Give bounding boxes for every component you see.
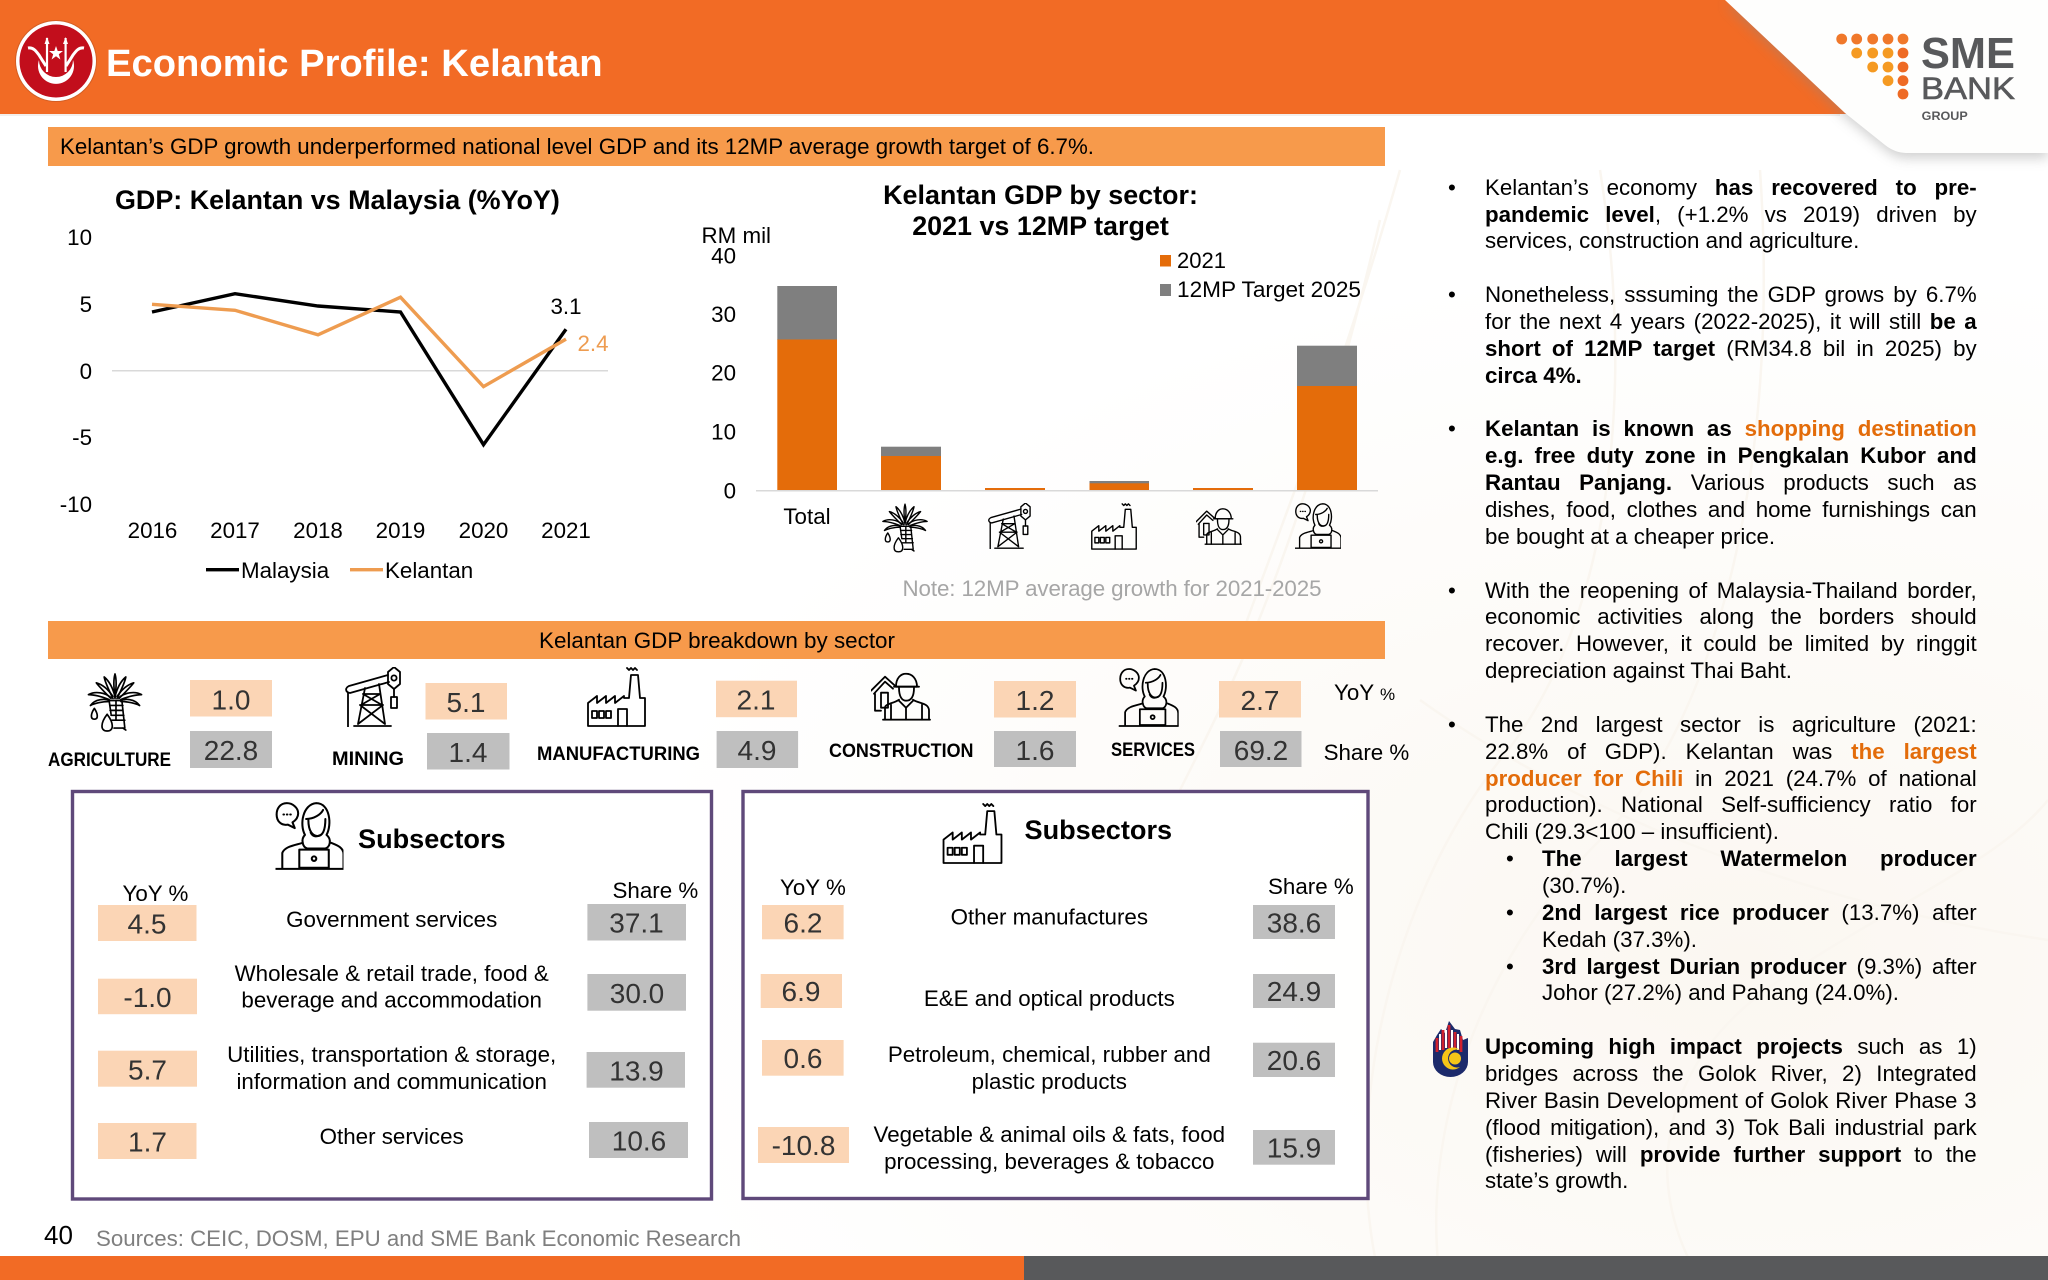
text block: 12MP target: short of 12MP target (RM34.8 bil in 2025) by [1485,336,1977,361]
text block: agriculture: Johor (27.2%) and Pahang (24.0%). [1542,980,1899,1005]
y axis labels: 40 [711,244,736,269]
text block: agriculture: (30.7%). [1542,873,1626,898]
line chart: GDP Kelantan vs Malaysia [60,185,609,583]
text block: shopping destination [1448,416,1977,549]
text block: agriculture: Chili (29.3<100 – insufficient). [1485,819,1779,844]
row: wholesale and retail: beverage and accommodation [241,988,542,1012]
icon: services [276,803,344,869]
y axis labels: 30 [711,302,736,327]
data label: Kelantan 2021: 2.4 [577,331,609,356]
sector: construction: 1.6 [1016,735,1054,766]
icon: agriculture [883,504,927,552]
text block: agriculture: Kedah (37.3%). [1542,927,1697,952]
series: Malaysia [152,294,566,445]
chart title: Kelantan GDP by sector: [883,180,1198,210]
x axis labels [128,518,591,543]
y axis labels: 10 [67,225,92,250]
row: government services: Government services [286,907,497,932]
y axis labels: 0 [80,359,92,384]
row: wholesale and retail: 30.0 [610,978,664,1009]
header shadow line [0,114,1840,116]
text block: agriculture: The largest Watermelon producer [1542,846,1977,871]
sector: mining: MINING [332,748,404,770]
y axis labels: 0 [724,479,736,504]
y axis labels: 20 [711,361,736,386]
text block: shopping destination: dishes, food, clothes and home furnishings can [1485,497,1977,522]
row label: Share %: Share % [1324,740,1409,765]
sector: agriculture: 1.0 [212,684,250,716]
row: wholesale and retail: Wholesale & retail trade, food & [235,961,549,986]
header bar [0,0,2048,114]
row: utilities and transport: 13.9 [609,1056,664,1086]
text block: agriculture: 3rd largest Durian producer (9.3%) after [1542,954,1977,979]
text block: high impact projects: state’s growth. [1485,1168,1628,1193]
row: wholesale and retail: -1.0 [123,982,172,1013]
row: other manufactures: 6.2 [784,908,822,938]
x axis labels: 2019 [376,518,425,543]
panel: commentary: • [1448,416,1456,441]
logo corner panel [1725,0,2048,158]
text block: agriculture: 22.8% of GDP). Kelantan was the largest [1485,739,1977,764]
legend: Malaysia [241,558,330,583]
sector: services: 2.7 [1241,685,1279,716]
sector: manufacturing: MANUFACTURING [537,743,700,765]
legend: 12MP Target 2025 [1177,277,1361,302]
icon: manufacturing [944,804,1001,863]
text block: border reopening: With the reopening of Malaysia-Thailand border, [1485,578,1977,603]
row: wholesale and retail [98,961,686,1014]
sector: construction: CONSTRUCTION [829,740,974,762]
text block: 12MP target [1448,282,1977,388]
y axis labels: -10 [60,492,92,517]
sector: mining: 1.4 [449,737,487,768]
legend: Kelantan [385,558,473,583]
icon: Kelantan state emblem [15,20,97,102]
sector: manufacturing: 2.1 [737,684,775,716]
row: E&E and optical [761,974,1335,1011]
column header: Share: Share % [612,878,698,903]
row: vegetable and animal oils: processing, beverages & tobacco [884,1149,1214,1174]
row: other manufactures: 38.6 [1267,908,1321,938]
text block: high impact projects: River Basin Development of Golok River Phase 3 [1485,1088,1977,1113]
x axis labels: 2018 [293,518,343,543]
sector: agriculture: 22.8 [204,735,258,766]
bars: 2021 [777,340,1357,491]
text block: shopping destination: be bought at a cheaper price. [1485,524,1775,549]
panel: manufacturing subsectors [743,792,1368,1198]
series: Kelantan [152,297,566,387]
y axis labels: 10 [711,420,736,445]
sector breakdown banner: Kelantan GDP breakdown by sector [539,628,896,653]
row: E&E and optical: E&E and optical products [924,986,1175,1011]
text block: agriculture: • [1506,900,1514,925]
row: utilities and transport: information and communication [236,1069,547,1094]
row: E&E and optical: 6.9 [782,976,820,1007]
legend [1160,248,1361,302]
background swirls [1180,170,2048,1280]
text block: 12MP target: circa 4%. [1485,363,1582,388]
row: other services: Other services [320,1124,464,1149]
column header: YoY: YoY % [122,881,188,906]
source note: Sources: CEIC, DOSM, EPU and SME Bank Economic Research [96,1226,741,1251]
text block: recovery: Kelantan’s economy has recovered to pre- [1485,175,1977,200]
row: petroleum and chemical: 0.6 [784,1043,822,1074]
headline banner: Kelantan’s GDP growth underperformed national level GDP and its 12MP average growth target of 6.7%. [60,134,1094,159]
chart title [883,180,1198,241]
sector: agriculture: AGRICULTURE [48,749,171,771]
panel: commentary: • [1448,712,1456,737]
row: vegetable and animal oils [758,1122,1335,1174]
text block: shopping destination: Rantau Panjang. Various products such as [1485,470,1977,495]
logo: SME Bank Group: SME [1921,29,2015,78]
y axis labels: -5 [72,425,92,450]
chart title: 2021 vs 12MP target [912,211,1169,241]
text block: recovery: services, construction and agriculture. [1485,228,1859,253]
row: petroleum and chemical: plastic products [972,1069,1127,1094]
row: E&E and optical: 24.9 [1267,976,1321,1007]
data label: Malaysia 2021: 3.1 [550,294,582,319]
row: other manufactures [762,904,1335,939]
sector: mining: 5.1 [447,687,485,718]
row: other services: 10.6 [612,1126,666,1156]
column header: YoY: YoY % [780,875,846,900]
text block: 12MP target: for the next 4 years (2022-2025), it will still be a [1485,309,1977,334]
text block: agriculture: • [1506,846,1514,871]
panel: commentary: • [1448,175,1456,200]
panel: commentary: • [1448,578,1456,603]
text block: agriculture: producer for Chili in 2021 (24.7% of national [1485,766,1977,791]
panel: commentary: • [1448,282,1456,307]
bar chart: Kelantan GDP by sector [702,180,1378,601]
panel heading: Subsectors [358,823,506,854]
text block: agriculture: production). National Self-sufficiency ratio for [1485,792,1977,817]
text block: shopping destination: e.g. free duty zone in Pengkalan Kubor and [1485,443,1977,468]
text block: recovery [1448,175,1977,253]
text block: agriculture [1448,712,1977,1005]
headline banner [48,127,1385,166]
note: Note: 12MP average growth for 2021-2025 [902,576,1322,601]
row: petroleum and chemical: Petroleum, chemical, rubber and [888,1042,1211,1067]
text block: high impact projects: bridges across the Golok River, 2) Integrated [1485,1061,1977,1086]
sector: services: 69.2 [1234,735,1288,766]
text block: high impact projects: Upcoming high impact projects such as 1) [1485,1034,1977,1059]
text block: border reopening: recover. However, it could be limited by ringgit [1485,631,1977,656]
sector: manufacturing [537,668,798,768]
sector: construction [829,674,1076,767]
row: government services: 37.1 [609,908,664,938]
text block: border reopening: depreciation against Thai Baht. [1485,658,1792,683]
icon: manufacturing [1092,504,1136,549]
x axis labels: 2020 [459,518,508,543]
text block: shopping destination: Kelantan is known as shopping destination [1485,416,1977,441]
x axis labels: 2017 [210,518,260,543]
panel: commentary [1448,175,1977,1193]
sector: construction: 1.2 [1016,685,1054,716]
y axis labels [711,244,736,504]
footer bar [0,1256,2048,1280]
row: other services: 1.7 [128,1126,167,1158]
text block: agriculture: • [1506,954,1514,979]
icon: Malaysia Madani hand [1433,1021,1468,1077]
row: vegetable and animal oils: 15.9 [1267,1132,1321,1164]
row: other services [98,1122,688,1159]
bars: 12MP target 2025 [777,286,1357,484]
x axis labels: 2021 [541,518,591,543]
category label: total: Total [783,504,831,529]
sector: services: SERVICES [1111,739,1195,761]
text block: border reopening [1448,578,1977,683]
row: utilities and transport: Utilities, transportation & storage, [227,1042,556,1067]
sector: agriculture [48,674,272,771]
row: utilities and transport: 5.7 [128,1054,167,1086]
logo: SME Bank Group: GROUP [1922,111,1968,123]
page number: 40 [44,1220,73,1250]
row: vegetable and animal oils: -10.8 [772,1130,835,1161]
text block: agriculture: The 2nd largest sector is agriculture (2021: [1485,712,1977,737]
title: Economic Profile: Kelantan [106,42,603,85]
sector breakdown banner [48,621,1385,659]
sector: manufacturing: 4.9 [738,735,776,766]
icon: construction [1196,509,1241,544]
row label: YoY %: YoY % [1334,680,1395,705]
legend: 2021 [1177,248,1226,273]
row: government services: 4.5 [128,908,166,940]
sector: mining [332,667,510,770]
legend [206,558,473,583]
row: other manufactures: Other manufactures [951,904,1148,930]
icon: services [1295,504,1341,548]
y axis labels: 5 [80,292,92,317]
row: vegetable and animal oils: Vegetable & animal oils & fats, food [874,1122,1225,1147]
text block: high impact projects: (flood mitigation), and 3) Tok Bali industrial park [1485,1115,1977,1140]
row: petroleum and chemical [762,1040,1335,1094]
icon: mining [989,503,1030,549]
column header: Share: Share % [1268,874,1354,899]
text block: recovery: pandemic level, (+1.2% vs 2019) driven by [1485,202,1977,227]
text block: 12MP target: Nonetheless, sssuming the GDP grows by 6.7% [1485,282,1977,307]
text block: border reopening: economic activities along the borders should [1485,604,1977,629]
logo: SME Bank Group: BANK [1921,70,2015,106]
text block: high impact projects [1485,1034,1977,1193]
row: petroleum and chemical: 20.6 [1267,1045,1321,1076]
chart title: GDP: Kelantan vs Malaysia (%YoY) [115,185,560,215]
panel heading: Subsectors [1024,814,1172,845]
logo: SME Bank Group [1836,29,2015,123]
x axis labels: 2016 [128,518,177,543]
unit label: RM mil [702,223,771,248]
row: utilities and transport [98,1042,685,1094]
row: government services [98,904,686,941]
text block: high impact projects: (fisheries) will provide further support to the [1485,1142,1977,1167]
panel: services subsectors [72,792,712,1199]
sector: services [1111,669,1302,767]
y axis labels [60,225,92,517]
text block: agriculture: 2nd largest rice producer (13.7%) after [1542,900,1977,925]
